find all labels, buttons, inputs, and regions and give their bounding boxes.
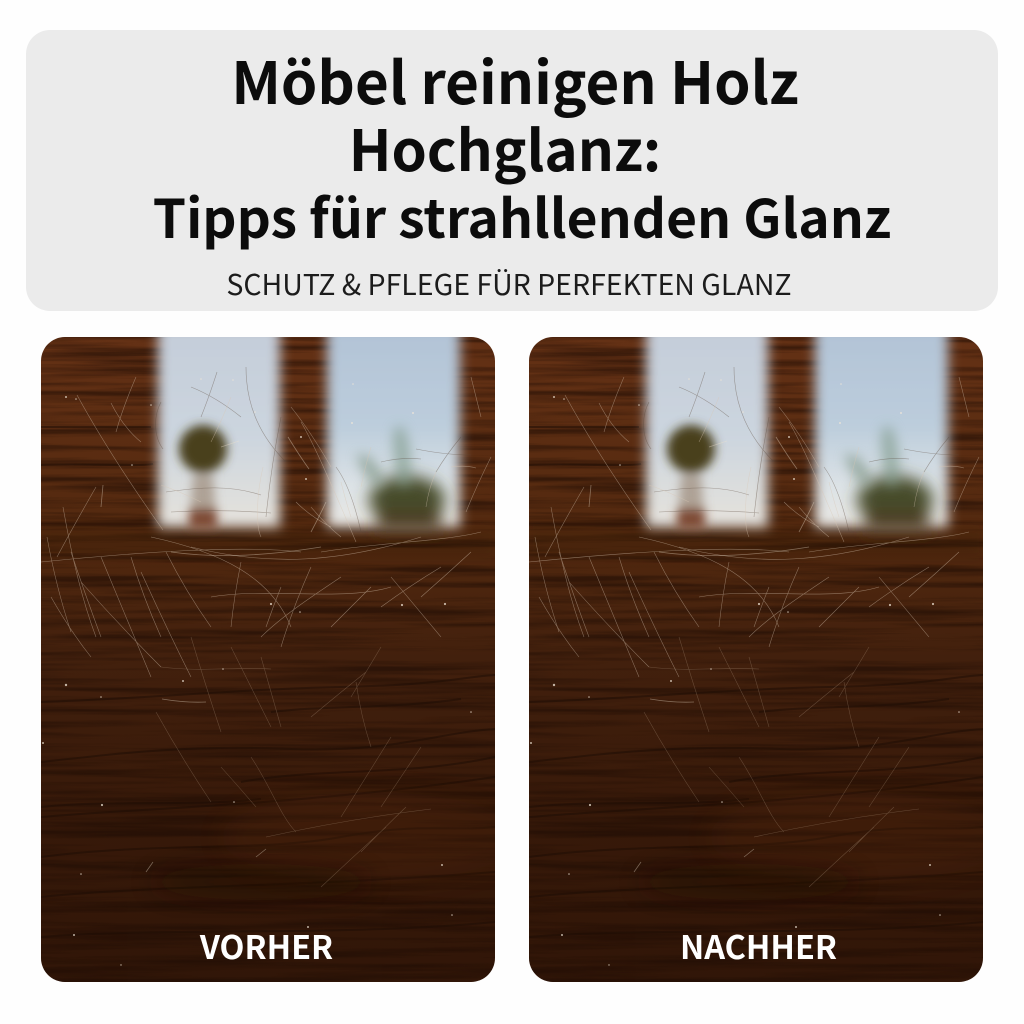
title: Möbel reinigen Holz [231,36,799,121]
title: Tipps für strahllenden Glanz [153,177,891,254]
label: Nachher: NACHHER [680,922,837,969]
subtitle: SCHUTZ & PFLEGE FÜR PERFEKTEN GLANZ [226,263,792,304]
header panel [26,30,998,311]
title [153,36,891,254]
title: Hochglanz: [349,106,661,188]
label: Vorher: VORHER [199,922,333,969]
